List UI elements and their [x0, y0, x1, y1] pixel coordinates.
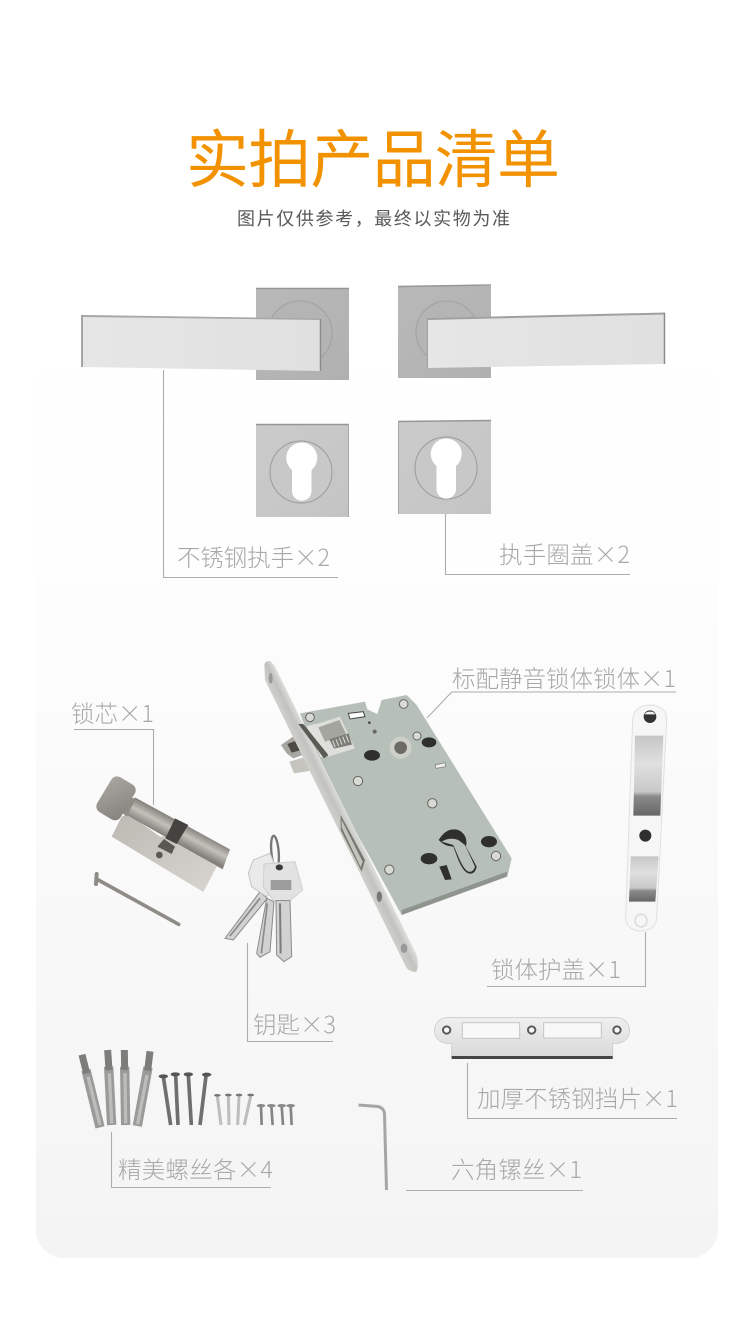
- callout: cover plate: 锁体护盖×1: [491, 951, 621, 985]
- callout: keys: [248, 943, 336, 1042]
- lock cylinder: [94, 774, 230, 924]
- key bunch: [225, 835, 303, 962]
- callout: screws: [112, 1132, 273, 1188]
- title: 实拍产品清单: [186, 126, 560, 196]
- short screws: [261, 1106, 292, 1125]
- spring window: [307, 712, 365, 757]
- callout: strike plate: 加厚不锈钢挡片×1: [477, 1080, 678, 1114]
- callout: cover plate: [487, 932, 646, 986]
- callout: mortise lock: [427, 660, 676, 718]
- left escutcheon cover: [256, 424, 349, 517]
- callout: keys: 钥匙×3: [253, 1006, 336, 1040]
- faceplate: [264, 661, 418, 972]
- latch and bolt: [281, 732, 316, 773]
- background panel: [36, 300, 718, 1258]
- strike plate: [434, 1018, 629, 1059]
- subtitle: 图片仅供参考，最终以实物为准: [237, 209, 510, 229]
- callout: cylinder: 锁芯×1: [71, 695, 154, 729]
- callout: hex key: 六角镙丝×1: [451, 1151, 582, 1185]
- screw and spindle holes: [364, 737, 497, 880]
- callout: handle cover: 执手圈盖×2: [499, 536, 630, 570]
- callout: stainless handle: 不锈钢执手×2: [177, 539, 330, 573]
- mortise lock body: [264, 661, 512, 972]
- lock case: [300, 695, 512, 915]
- callout: cylinder: [71, 695, 154, 805]
- right lever handle: [398, 285, 665, 378]
- long pin: [96, 874, 179, 924]
- right escutcheon cover: [398, 420, 491, 514]
- callout: screws: 精美螺丝各×4: [118, 1151, 273, 1185]
- wood screws: [217, 1096, 251, 1125]
- left lever handle: [82, 288, 349, 380]
- screw set: [82, 1050, 295, 1127]
- long standoffs: [82, 1050, 150, 1127]
- machine screws: [163, 1075, 206, 1125]
- callout: handle cover: [446, 514, 630, 574]
- callout: stainless handle: [164, 370, 338, 578]
- callout: mortise lock: 标配静音锁体锁体×1: [452, 660, 676, 694]
- hex key: [358, 1105, 386, 1190]
- lock body cover plate: [626, 705, 667, 931]
- callout: strike plate: [468, 1063, 678, 1118]
